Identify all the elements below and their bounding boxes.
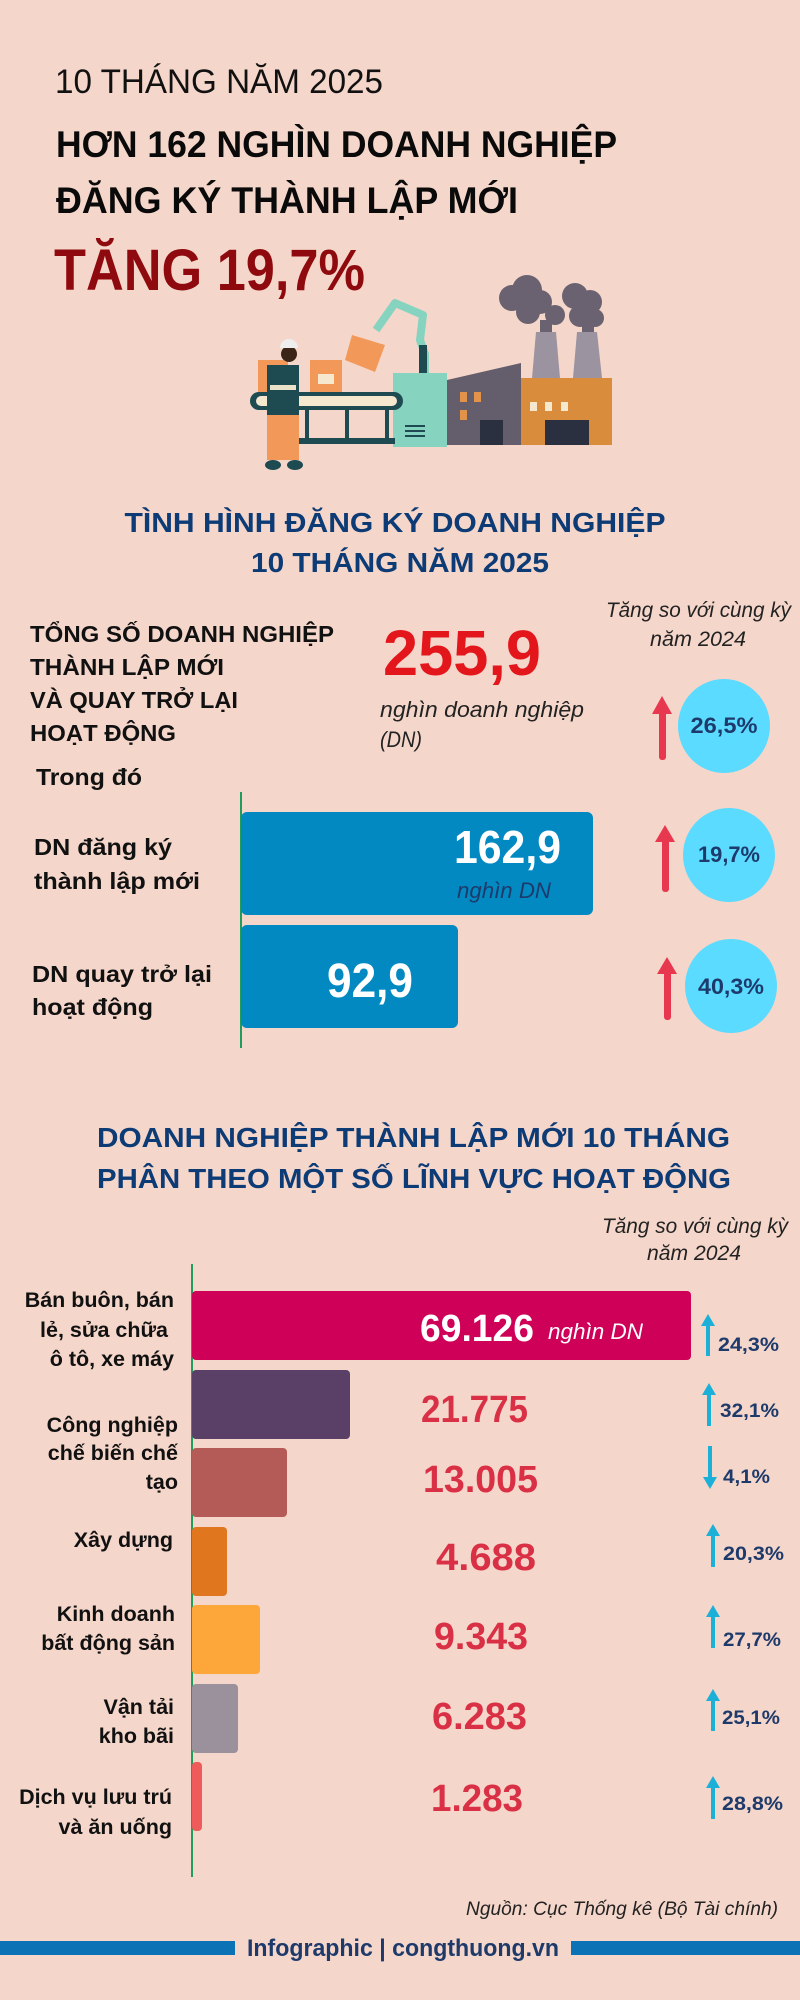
text: total label: THÀNH LẬP MỚI (30, 653, 224, 680)
title: headline (56, 123, 617, 221)
badge: 19,7%: 19,7% (698, 842, 760, 867)
sector change percents: 25,1% (722, 1708, 780, 1729)
total value: nghìn doanh nghiệp (380, 697, 584, 722)
section 2 heading: PHÂN THEO MỘT SỐ LĨNH VỰC HOẠT ĐỘNG (97, 1162, 731, 1194)
sector labels: kho bãi (99, 1724, 174, 1748)
sector labels: bất động sản (41, 1631, 175, 1655)
sector values: nghìn DN (548, 1319, 643, 1344)
text: total label: TỔNG SỐ DOANH NGHIỆP (30, 620, 334, 647)
arrow: new up (655, 825, 675, 892)
arrow: total up (652, 696, 672, 760)
sector change percents: 20,3% (723, 1544, 784, 1565)
footer (0, 1935, 800, 1962)
legend: compare note 1: năm 2024 (650, 628, 746, 651)
legend: compare note 1: Tăng so với cùng kỳ (606, 599, 792, 622)
sector change arrows (701, 1314, 720, 1819)
section 2 heading (97, 1122, 731, 1194)
bar: new registrations: nghìn DN (457, 878, 551, 903)
axis 2 (191, 1264, 193, 1877)
sector labels: Kinh doanh (57, 1602, 175, 1626)
sector labels: Xây dựng (74, 1528, 173, 1552)
label: new: thành lập mới (34, 868, 200, 894)
legend: compare note 2: Tăng so với cùng kỳ (602, 1215, 789, 1238)
badge: 26,5%: 26,5% (690, 713, 758, 738)
title: period: 10 THÁNG NĂM 2025 (55, 63, 383, 101)
bar chart: sectors (192, 1291, 691, 1831)
text: total label: HOẠT ĐỘNG (30, 719, 176, 746)
bar: new registrations: 162,9 (454, 821, 561, 873)
section 1 heading: 10 THÁNG NĂM 2025 (251, 547, 549, 578)
bar: new registrations (241, 812, 593, 915)
total value: (DN) (380, 727, 422, 752)
sector change percents (718, 1335, 784, 1815)
bar: returning (241, 925, 458, 1028)
sector change percents: 4,1% (723, 1467, 770, 1488)
label: returning: hoạt động (32, 994, 153, 1020)
title: headline: HƠN 162 NGHÌN DOANH NGHIỆP (56, 123, 617, 165)
arrow: returning up (657, 957, 677, 1020)
section 1 heading: TÌNH HÌNH ĐĂNG KÝ DOANH NGHIỆP (124, 507, 666, 538)
label: new (34, 834, 200, 894)
sector values (420, 1308, 643, 1820)
text: total label (30, 620, 334, 746)
sector labels: Bán buôn, bán (25, 1288, 174, 1312)
sector labels: lẻ, sửa chữa (40, 1318, 169, 1342)
legend: compare note 2: năm 2024 (647, 1242, 741, 1265)
sector change percents: 24,3% (718, 1335, 779, 1356)
sector values: 1.283 (431, 1778, 523, 1820)
sector labels: ô tô, xe máy (50, 1347, 174, 1371)
sector labels: Công nghiệp (47, 1413, 178, 1437)
sector values: 4.688 (436, 1537, 536, 1579)
sector labels (19, 1288, 178, 1839)
sector change percents: 28,8% (722, 1794, 783, 1815)
title: growth: TĂNG 19,7% (54, 238, 365, 303)
sector labels: và ăn uống (59, 1815, 172, 1839)
section 1 heading (124, 507, 666, 578)
text: total label: VÀ QUAY TRỞ LẠI (30, 685, 238, 713)
source: Nguồn: Cục Thống kê (Bộ Tài chính) (466, 1899, 778, 1920)
legend: compare note 2 (602, 1215, 789, 1265)
illustration: factory (250, 275, 612, 470)
sector labels: tạo (146, 1470, 178, 1494)
badge: 26,5% (678, 679, 770, 773)
sector values: 69.126 (420, 1308, 534, 1350)
bar: returning: 92,9 (327, 955, 413, 1008)
legend: compare note 1 (606, 599, 792, 651)
text: trong do: Trong đó (36, 764, 142, 790)
sector change percents: 32,1% (720, 1401, 779, 1422)
total value (380, 617, 584, 752)
sector values: 6.283 (432, 1696, 527, 1738)
label: returning (32, 961, 212, 1020)
footer: Infographic | congthuong.vn (247, 1935, 559, 1962)
sector values: 13.005 (423, 1459, 538, 1501)
label: new: DN đăng ký (34, 834, 172, 860)
sector values: 9.343 (434, 1616, 528, 1658)
total value: 255,9 (383, 617, 541, 689)
badge: 40,3%: 40,3% (698, 974, 764, 999)
sector values: 21.775 (421, 1389, 528, 1431)
sector labels: Dịch vụ lưu trú (19, 1785, 172, 1809)
sector labels: chế biến chế (48, 1441, 178, 1465)
badge: 40,3% (685, 939, 777, 1033)
axis 1 (240, 792, 242, 1048)
section 2 heading: DOANH NGHIỆP THÀNH LẬP MỚI 10 THÁNG (97, 1122, 730, 1153)
badge: 19,7% (683, 808, 775, 902)
sector labels: Vận tải (104, 1695, 174, 1719)
title: headline: ĐĂNG KÝ THÀNH LẬP MỚI (56, 179, 518, 221)
label: returning: DN quay trở lại (32, 961, 212, 987)
sector change percents: 27,7% (723, 1630, 781, 1651)
